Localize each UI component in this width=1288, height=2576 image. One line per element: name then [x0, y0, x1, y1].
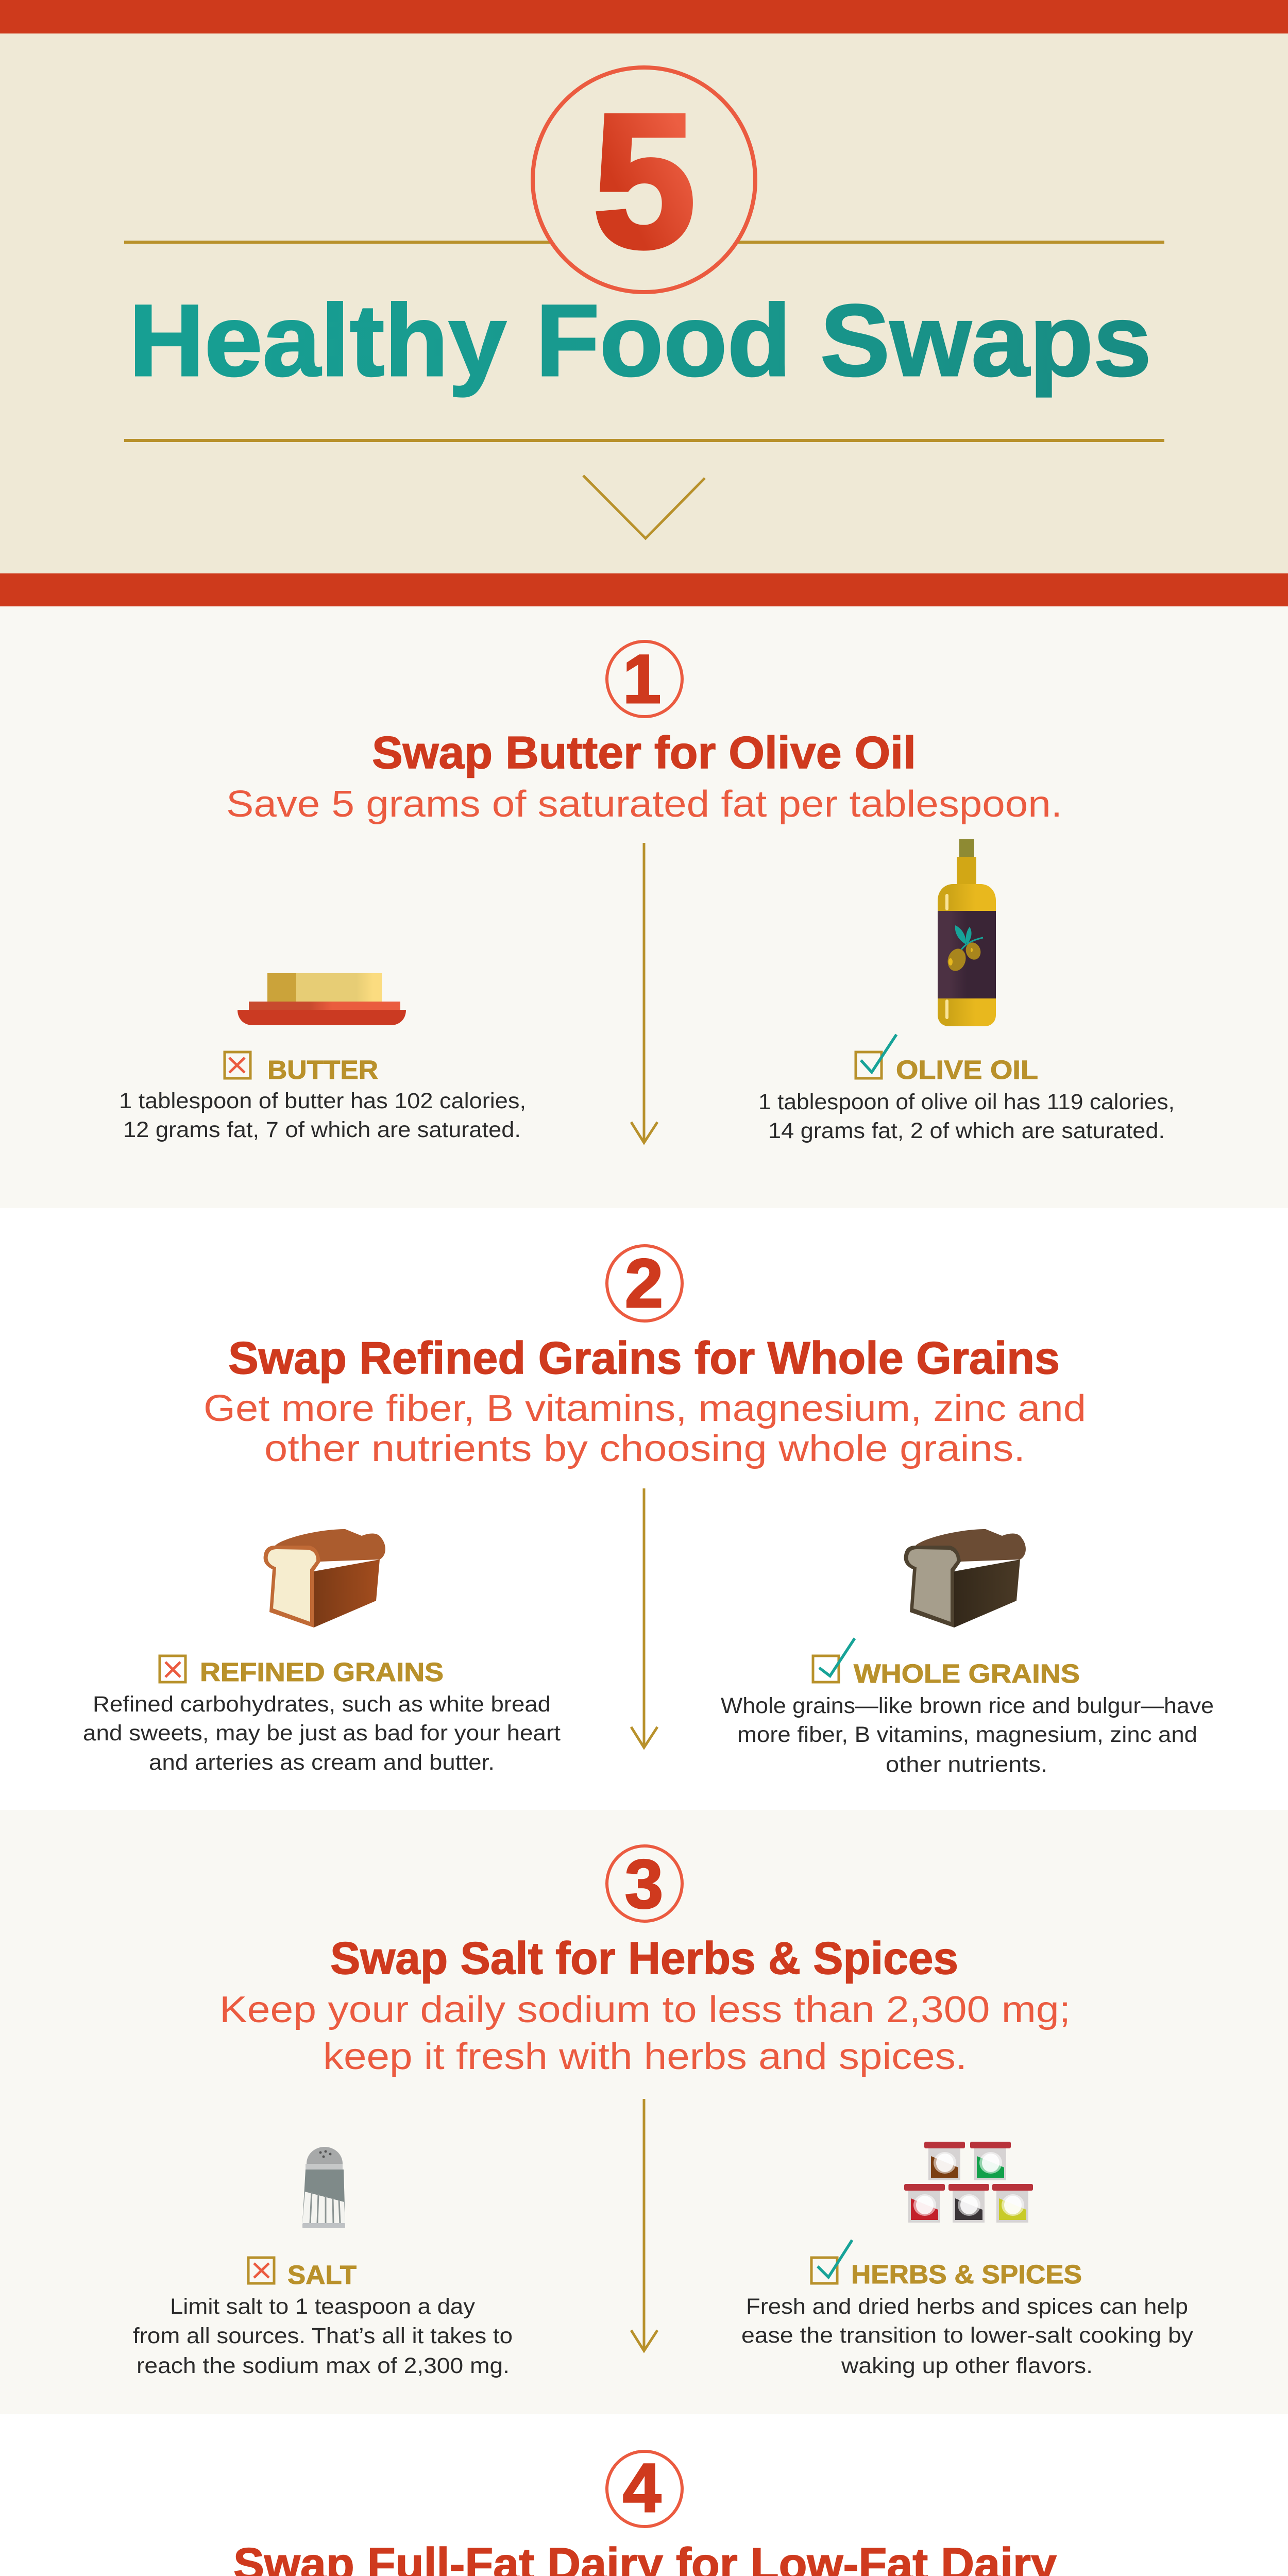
- big number badge: 5: [593, 75, 696, 286]
- text: refined grains facts: Refined carbohydrates, such as white bread: [93, 1692, 551, 1717]
- subheading: [204, 1388, 1086, 1469]
- arrow: [631, 843, 657, 1143]
- icon: olive oil bottle: [938, 839, 996, 1026]
- icon: spice jars: [904, 2142, 1033, 2223]
- text: butter facts: 1 tablespoon of butter has 102 calories,: [119, 1089, 526, 1113]
- text: salt facts: [133, 2294, 513, 2378]
- panel: swap 1 butter to olive oil: [0, 606, 1288, 1208]
- number badge 1: 1: [623, 641, 661, 718]
- number badge 2: [607, 1245, 682, 1322]
- text: olive oil facts: 14 grams fat, 2 of which are saturated.: [768, 1118, 1165, 1143]
- top red band: [0, 0, 1288, 33]
- text: herbs and spices facts: waking up other flavors.: [841, 2353, 1093, 2378]
- text: herbs and spices facts: Fresh and dried herbs and spices can help: [746, 2294, 1188, 2319]
- label: butter: BUTTER: [267, 1055, 378, 1084]
- heading: Swap Refined Grains for Whole Grains: [228, 1332, 1060, 1383]
- icon: x box: [160, 1656, 185, 1682]
- label: salt: SALT: [287, 2260, 357, 2290]
- text: olive oil facts: 1 tablespoon of olive oil has 119 calories,: [758, 1090, 1175, 1114]
- subheading: keep it fresh with herbs and spices.: [323, 2036, 967, 2077]
- number badge 2: 2: [625, 1245, 663, 1322]
- number badge 1: [607, 641, 682, 718]
- icon: white bread: [264, 1529, 385, 1628]
- number badge 3: 3: [625, 1846, 663, 1923]
- icon: check box: [813, 1638, 855, 1682]
- panel: swap 3 salt to herbs and spices: [0, 1810, 1288, 2414]
- subheading: Save 5 grams of saturated fat per tablespoon.: [226, 784, 1062, 825]
- text: herbs and spices facts: [741, 2294, 1194, 2378]
- text: butter facts: 12 grams fat, 7 of which are saturated.: [123, 1117, 521, 1142]
- text: salt facts: from all sources. That’s all it takes to: [133, 2324, 513, 2348]
- bottom red band: [0, 573, 1288, 606]
- text: olive oil facts: [758, 1090, 1175, 1143]
- chevron arrow: [583, 476, 705, 538]
- label: herbs and spices: HERBS & SPICES: [851, 2260, 1082, 2289]
- text: herbs and spices facts: ease the transition to lower-salt cooking by: [741, 2323, 1194, 2348]
- text: refined grains facts: and arteries as cream and butter.: [149, 1750, 495, 1775]
- icon: whole grain bread: [904, 1529, 1026, 1628]
- icon: salt shaker: [302, 2147, 345, 2228]
- text: whole grains facts: other nutrients.: [886, 1752, 1047, 1777]
- text: whole grains facts: Whole grains—like brown rice and bulgur—have: [721, 1693, 1214, 1718]
- number badge 4: [607, 2450, 682, 2527]
- text: salt facts: reach the sodium max of 2,300 mg.: [137, 2353, 510, 2378]
- text: refined grains facts: and sweets, may be just as bad for your heart: [83, 1721, 561, 1745]
- gold rule lower: [124, 439, 1164, 442]
- gold rule upper: [124, 241, 1164, 244]
- label: olive oil: OLIVE OIL: [896, 1055, 1038, 1084]
- text: refined grains facts: [83, 1692, 561, 1775]
- panel: swap 2 refined to whole grains: [0, 1208, 1288, 1810]
- heading: Swap Butter for Olive Oil: [372, 727, 916, 778]
- panel: swap 4 full-fat to low-fat dairy: [0, 2414, 1288, 2576]
- icon: check box: [856, 1035, 896, 1078]
- label: whole grains: WHOLE GRAINS: [854, 1659, 1080, 1688]
- text: whole grains facts: more fiber, B vitamins, magnesium, zinc and: [737, 1722, 1197, 1747]
- number badge 4: 4: [623, 2450, 661, 2527]
- icon: check box: [811, 2240, 852, 2283]
- panel: title banner: [0, 0, 1288, 606]
- label: refined grains: REFINED GRAINS: [200, 1657, 444, 1687]
- number badge 3: [607, 1846, 682, 1923]
- subheading: Keep your daily sodium to less than 2,300 mg;: [219, 1989, 1071, 2030]
- text: salt facts: Limit salt to 1 teaspoon a day: [170, 2294, 476, 2319]
- text: butter facts: [119, 1089, 526, 1142]
- text: whole grains facts: [721, 1693, 1214, 1777]
- arrow: [631, 1488, 657, 1748]
- big number badge: [533, 67, 755, 292]
- icon: x box: [225, 1052, 250, 1078]
- main title: Healthy Food Swaps: [129, 283, 1151, 397]
- icon: butter on dish: [238, 973, 406, 1025]
- subheading: [219, 1989, 1071, 2077]
- subheading: Get more fiber, B vitamins, magnesium, zinc and: [204, 1388, 1086, 1429]
- heading: Swap Salt for Herbs & Spices: [330, 1933, 958, 1984]
- arrow: [631, 2099, 657, 2351]
- icon: x box: [248, 2258, 274, 2283]
- subheading: other nutrients by choosing whole grains.: [264, 1428, 1025, 1469]
